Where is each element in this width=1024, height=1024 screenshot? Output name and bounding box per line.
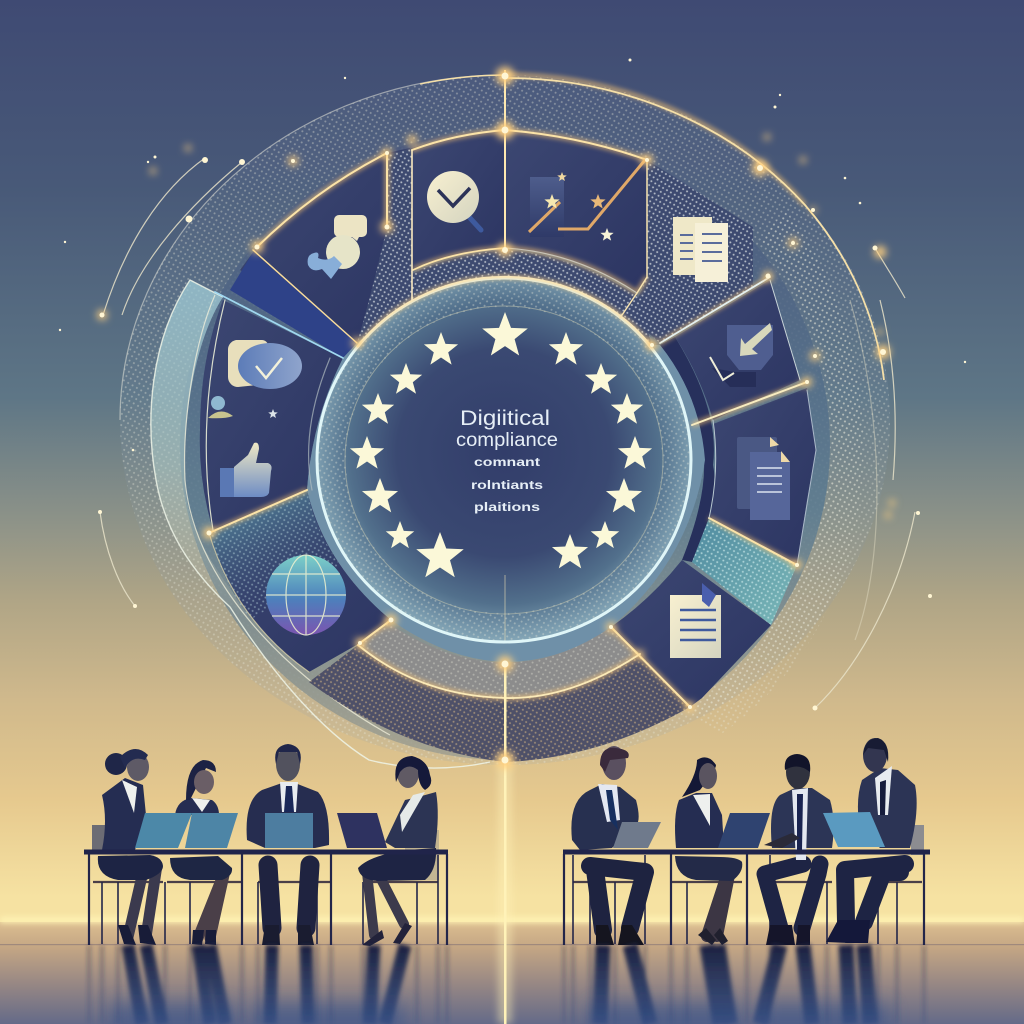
icon: speech bubble check: [228, 340, 302, 389]
icon: rising chart: [529, 160, 645, 241]
band around centre top: [360, 250, 652, 345]
reflective floor: [0, 917, 1024, 1024]
panel: top right chart: [505, 130, 647, 293]
chairs and tables: left group: [89, 825, 447, 945]
icon: documents: [673, 217, 728, 282]
thin outer arcs: [100, 158, 915, 708]
panel: lower left globe: [209, 490, 391, 672]
glowing nodes: [59, 58, 966, 769]
centre text: [456, 407, 558, 514]
slate disc behind panels: [180, 130, 830, 760]
panel: top centre check: [412, 130, 505, 270]
band right of centre: [660, 337, 715, 562]
panel: teal dotted: [692, 518, 797, 625]
gold upper arc: [420, 75, 884, 380]
person 2: [170, 760, 232, 945]
centre text: Digiitical: [460, 407, 550, 430]
person 8: [826, 738, 917, 943]
centre text: compliance: [456, 430, 558, 451]
centre text: comnant: [474, 455, 540, 469]
icon: document lower right: [670, 583, 721, 658]
panel edge lines: [206, 130, 816, 707]
EU star ring: [350, 312, 652, 577]
panel: top left speech: [230, 148, 412, 358]
panel: left: [200, 300, 343, 530]
floor reflection haze: [110, 1004, 890, 1024]
pale left band: [151, 280, 490, 768]
table tops: [84, 850, 930, 854]
panel glow lines: [209, 130, 807, 707]
icon: magnifier check: [427, 171, 481, 230]
person 1: [98, 749, 163, 945]
icon: checkbox with arrow: [710, 323, 773, 387]
icon: speech bubbles: [308, 215, 367, 279]
laptops: [135, 812, 885, 848]
centre circle: [317, 278, 691, 642]
centre text: plaitions: [474, 500, 540, 514]
icon: document right: [737, 437, 790, 520]
vertical light beam: [498, 70, 512, 1024]
gold rim highlight: [357, 277, 652, 347]
right outer dotted band: [690, 210, 863, 735]
panel: bottom dotted band: [309, 623, 690, 762]
panel: lower right document: [611, 560, 771, 707]
panel: upper right dotted: [630, 160, 753, 343]
centre text: rolntiants: [471, 478, 543, 492]
person 5: [571, 746, 645, 945]
floor reflections: [89, 945, 924, 1024]
person 4: [358, 756, 438, 946]
icon: small person: [208, 396, 278, 418]
icon: globe: [266, 555, 346, 635]
ring outside centre rim: [307, 277, 705, 662]
person 3: [247, 744, 329, 945]
person 7: [764, 754, 834, 945]
person 6: [675, 757, 742, 945]
panel: right upper: [675, 280, 800, 420]
panel: right: [709, 388, 816, 565]
chairs and tables: right group: [564, 825, 924, 945]
icon: thumbs up: [220, 443, 272, 497]
outer dotted ring: [120, 75, 890, 765]
